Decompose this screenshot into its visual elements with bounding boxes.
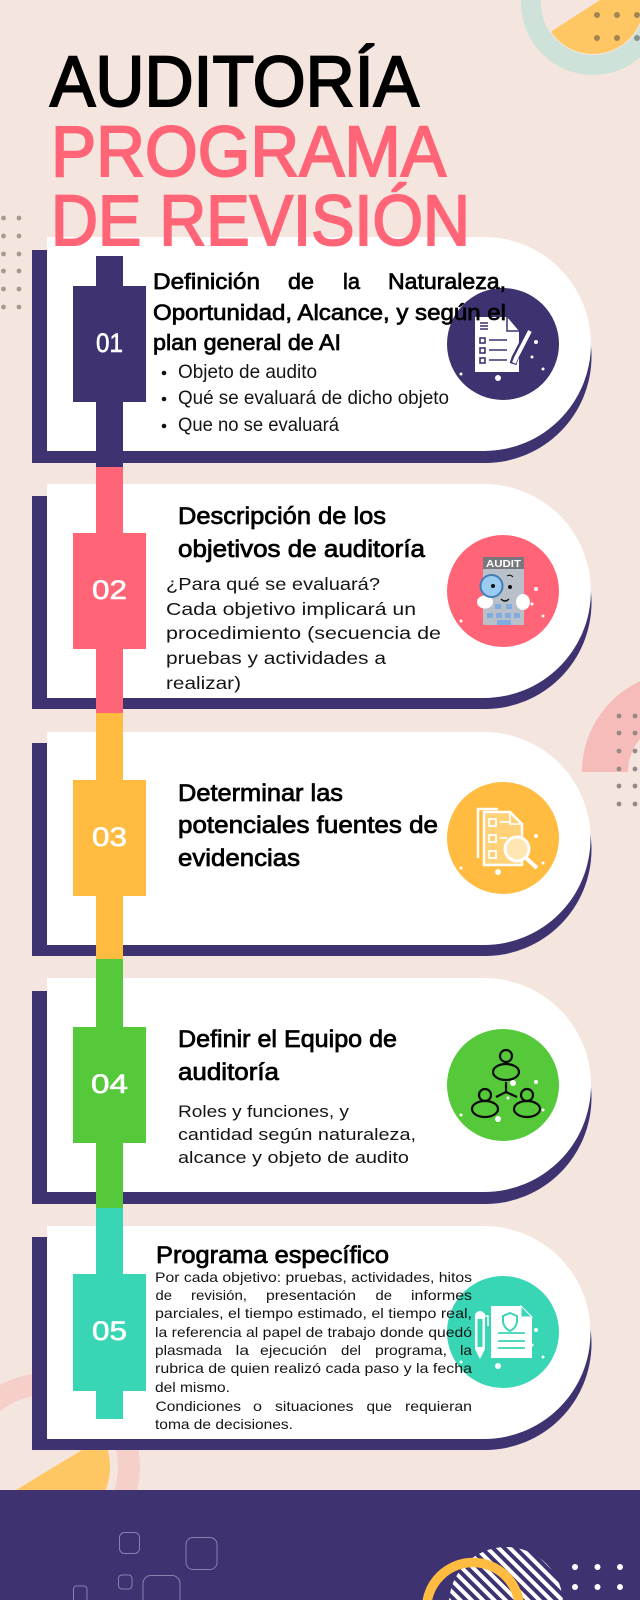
body text step 2: ¿Para qué se evaluará?: [166, 574, 380, 594]
body text step 5: [155, 1269, 472, 1432]
body text step 5: del mismo.: [155, 1379, 230, 1395]
body text step 5: requieran: [405, 1398, 472, 1414]
decoration: top right ring and half disc: [531, 0, 640, 65]
heading step 1: Definición: [153, 269, 260, 294]
number 01: 01: [96, 328, 123, 358]
heading step 1: Oportunidad, Alcance, y según el: [153, 300, 506, 325]
body text step 5: la: [460, 1342, 472, 1358]
icon: checklist document and pencil: [447, 288, 559, 400]
bullet list step 1: Que no se evaluará: [178, 415, 339, 436]
number 05: 05: [92, 1316, 127, 1346]
decoration: left dot grid: [1, 216, 21, 309]
card 3: [47, 732, 590, 945]
card shadow 5: [32, 1237, 592, 1450]
panel: step 1: [32, 237, 592, 467]
card 1: [47, 237, 591, 451]
icon: three connected people: [447, 1029, 559, 1141]
body text step 4: Roles y funciones, y: [178, 1102, 350, 1121]
heading step 3: evidencias: [178, 845, 300, 872]
title: AUDITORÍA: [50, 43, 420, 122]
timeline segment 4: [73, 959, 146, 1208]
body text step 5: plasmada: [155, 1342, 222, 1358]
decoration: bottom left ring and half disc: [0, 1374, 140, 1490]
icon: checklist with magnifier: [447, 782, 559, 894]
card 4: [47, 978, 591, 1192]
timeline segment 2: [73, 467, 146, 713]
body text step 4: alcance y objeto de audito: [178, 1148, 409, 1167]
body text step 5: la: [236, 1342, 249, 1358]
body text step 5: Condiciones: [156, 1398, 241, 1414]
body text step 5: presentación: [266, 1287, 356, 1303]
body text step 2: pruebas y actividades a: [166, 648, 386, 668]
timeline segment 3: [73, 713, 146, 959]
body text step 4: cantidad según naturaleza,: [178, 1125, 416, 1144]
body text step 5: parciales, el tiempo estimado, el tiempo real,: [155, 1305, 472, 1321]
icon: audit building with magnifier: [447, 535, 559, 647]
heading step 2: [178, 503, 426, 563]
bullet list step 1: [162, 362, 449, 436]
card shadow 1: [32, 250, 592, 463]
body text step 5: que: [366, 1398, 392, 1414]
footer band: [0, 1490, 640, 1600]
body text step 5: del: [341, 1342, 361, 1358]
body text step 5: informes: [411, 1287, 472, 1303]
panel: step 3: [32, 713, 592, 959]
body text step 4: [178, 1102, 416, 1167]
body text step 5: o: [253, 1398, 262, 1414]
card shadow 2: [32, 496, 592, 709]
heading step 1: de: [288, 269, 314, 294]
heading step 1: la: [343, 269, 361, 294]
panel: step 4: [32, 959, 592, 1208]
heading step 3: potenciales fuentes de: [178, 812, 438, 839]
decoration: right pink arch with dots: [582, 672, 640, 806]
body text step 5: programa,: [375, 1342, 447, 1358]
heading step 2: objetivos de auditoría: [178, 536, 426, 563]
body text step 2: procedimiento (secuencia de: [166, 623, 441, 643]
number 04: 04: [91, 1069, 128, 1099]
heading step 1: [153, 269, 506, 355]
title: PROGRAMA: [51, 113, 447, 192]
body text step 5: rubrica de quien realizó cada paso y la fecha: [155, 1360, 472, 1376]
body text step 2: realizar): [166, 673, 241, 693]
body text step 2: Cada objetivo implicará un: [166, 599, 416, 619]
heading step 3: [178, 780, 438, 872]
body text step 5: de: [376, 1287, 392, 1303]
icon: document with shield and pen: [447, 1276, 559, 1388]
decoration: striped circle and yellow ring: [426, 1547, 563, 1600]
timeline segment 1: [73, 256, 146, 467]
decoration: outlined rounded squares: [74, 1532, 217, 1600]
icon: audit building with magnifier: AUDIT: [486, 558, 522, 570]
body text step 2: [166, 574, 441, 693]
heading step 4: auditoría: [178, 1059, 280, 1086]
body text step 5: situaciones: [275, 1398, 354, 1414]
heading step 4: [178, 1026, 397, 1086]
heading step 3: Determinar las: [178, 780, 343, 807]
panel: step 5: [32, 1208, 592, 1450]
bullet list step 1: Objeto de audito: [178, 362, 317, 383]
body text step 5: de: [156, 1287, 172, 1303]
number 02: 02: [92, 575, 127, 605]
decoration: white dot grid: [572, 1564, 623, 1590]
card 2: [47, 484, 591, 698]
card 5: [47, 1226, 590, 1439]
bullet list step 1: Qué se evaluará de dicho objeto: [178, 388, 449, 409]
title: DE REVISIÓN: [51, 182, 470, 261]
heading step 5: Programa específico: [156, 1242, 389, 1269]
panel: step 2: [32, 467, 592, 713]
card shadow 3: [32, 743, 592, 956]
body text step 5: la referencia al papel de trabajo donde quedó: [155, 1324, 472, 1340]
title: [50, 43, 470, 261]
body text step 5: toma de decisiones.: [155, 1416, 293, 1432]
number 03: 03: [92, 822, 127, 852]
heading step 1: Naturaleza,: [388, 269, 506, 294]
card shadow 4: [32, 991, 592, 1204]
heading step 1: plan general de AI: [153, 330, 341, 355]
body text step 5: ejecución: [260, 1342, 327, 1358]
heading step 4: Definir el Equipo de: [178, 1026, 397, 1053]
timeline segment 5: [73, 1208, 146, 1419]
body text step 5: Por cada objetivo: pruebas, actividades, hitos: [155, 1269, 472, 1285]
heading step 2: Descripción de los: [178, 503, 386, 530]
body text step 5: revisión,: [191, 1287, 247, 1303]
